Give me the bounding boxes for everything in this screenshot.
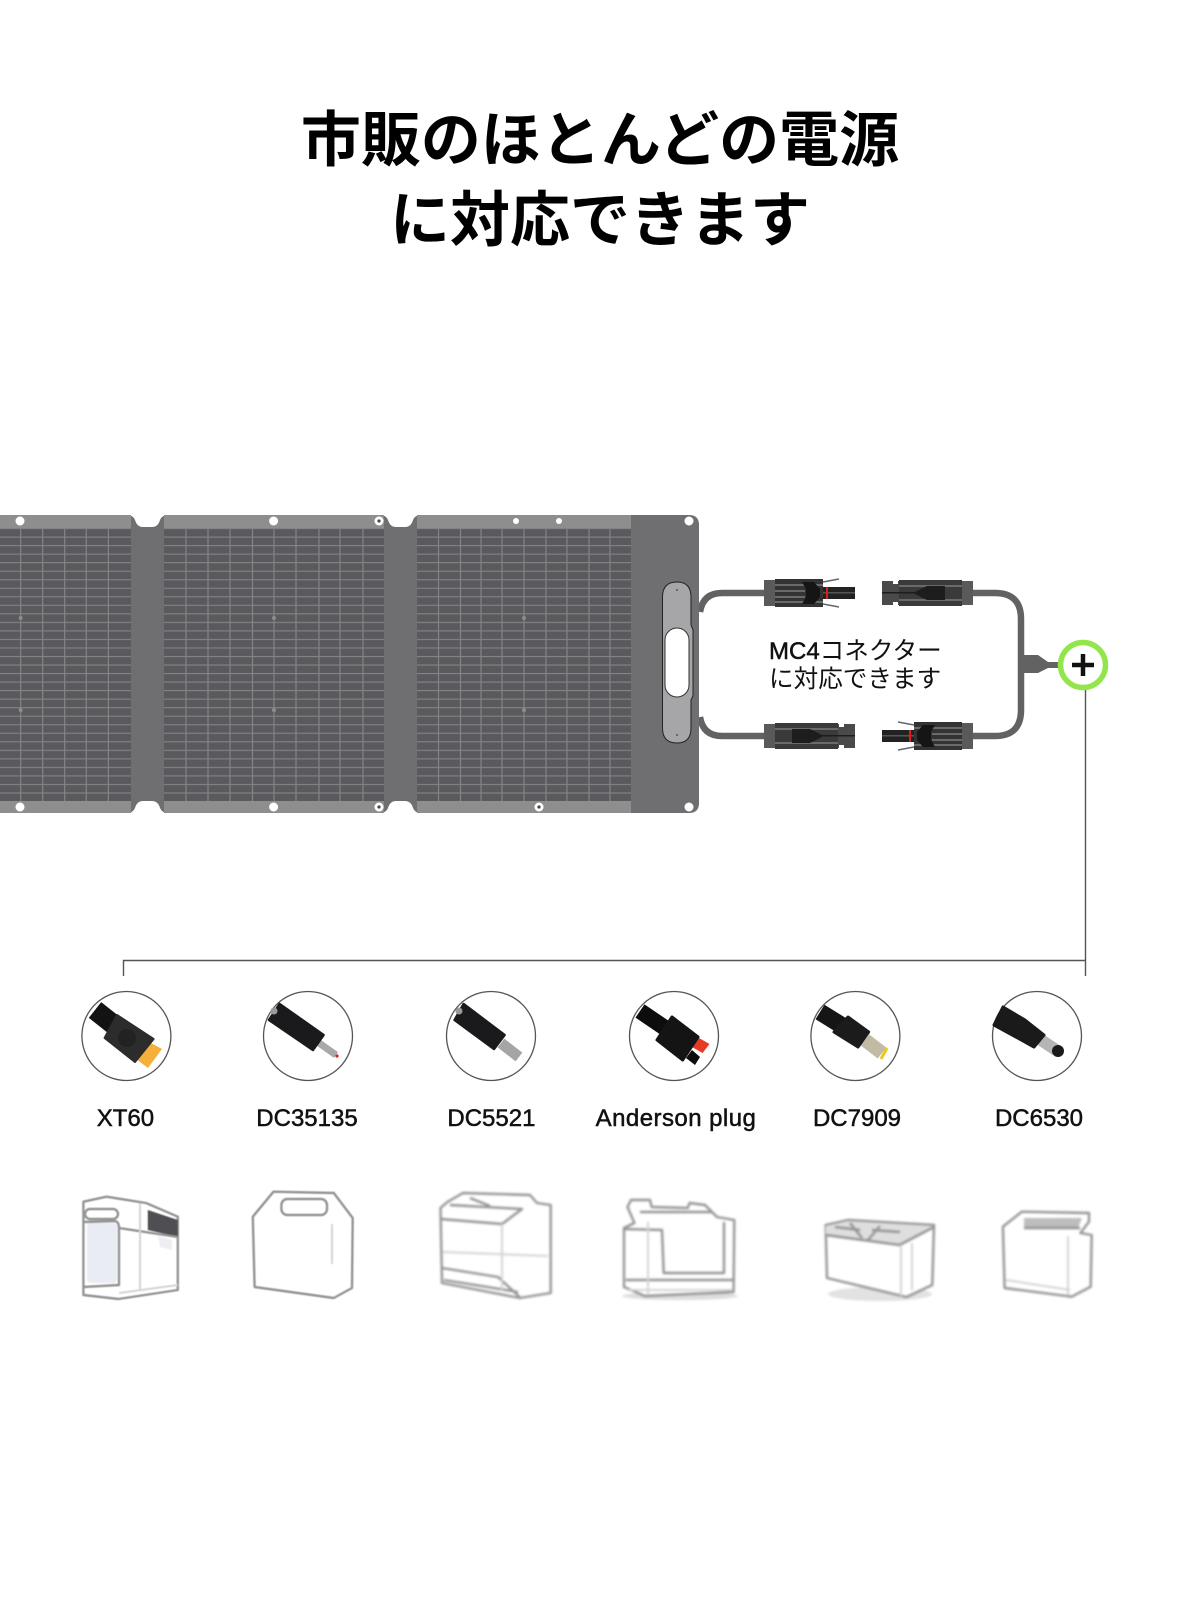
connection bracket bbox=[124, 690, 1086, 976]
product outline 1 bbox=[83, 1197, 178, 1299]
icon: Anderson plug bbox=[630, 992, 718, 1080]
label: DC35135: DC35135 bbox=[256, 1105, 358, 1132]
connector top right bbox=[882, 580, 973, 606]
icon: DC6530 connector bbox=[992, 992, 1082, 1080]
label: DC7909: DC7909 bbox=[813, 1105, 901, 1132]
label: DC5521: DC5521 bbox=[447, 1105, 535, 1132]
title: 市販のほとんどの電源 bbox=[301, 107, 899, 174]
carrying handle bbox=[662, 582, 693, 743]
icon: XT60 connector bbox=[82, 992, 171, 1080]
plus button bbox=[1060, 642, 1106, 688]
title bbox=[301, 107, 899, 254]
mounting holes bbox=[16, 516, 694, 812]
product outline 3 bbox=[440, 1193, 551, 1298]
cables bbox=[700, 593, 1021, 736]
product outline 6 bbox=[1003, 1212, 1092, 1297]
connector bottom left bbox=[764, 723, 855, 749]
solar module middle bbox=[164, 515, 384, 813]
product outline 4 bbox=[622, 1200, 738, 1300]
MC4 caption bbox=[769, 638, 942, 693]
label: XT60: XT60 bbox=[97, 1105, 154, 1132]
label: Anderson plug: Anderson plug bbox=[596, 1105, 756, 1132]
MC4 caption: に対応できます bbox=[769, 665, 941, 693]
solar module left bbox=[0, 515, 131, 813]
product outline 5 bbox=[826, 1220, 934, 1301]
solar module right bbox=[417, 515, 631, 813]
icon: DC35135 connector bbox=[264, 992, 352, 1080]
label: DC6530: DC6530 bbox=[995, 1105, 1083, 1132]
panel body silhouette bbox=[0, 515, 699, 813]
solar panel bbox=[0, 515, 699, 813]
icon: DC5521 connector bbox=[446, 992, 536, 1080]
MC4 caption: MC4コネクター bbox=[769, 638, 942, 665]
junction to plus button bbox=[1024, 655, 1060, 673]
icon: DC7909 connector bbox=[811, 992, 900, 1080]
product outline 2 bbox=[253, 1192, 353, 1298]
title: に対応できます bbox=[390, 187, 810, 254]
connector top left bbox=[764, 579, 855, 607]
connector bottom right bbox=[882, 722, 973, 750]
